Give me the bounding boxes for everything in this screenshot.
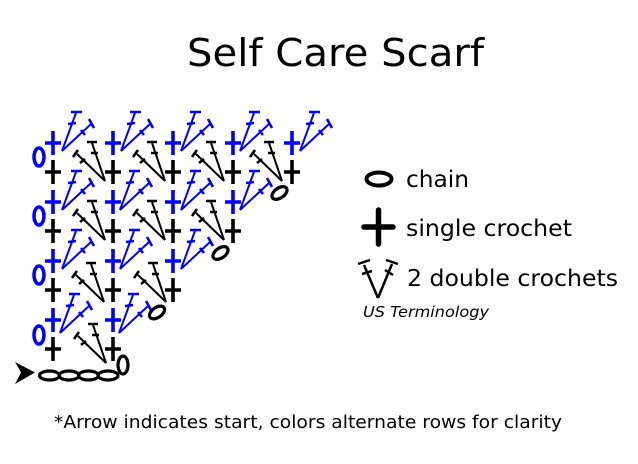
legend: single crochet: single crochet	[406, 216, 572, 242]
title: Self Care Scarf	[187, 31, 486, 76]
legend	[358, 167, 618, 321]
legend: 2 double crochets: 2 double crochets	[407, 266, 618, 292]
footnote: *Arrow indicates start, colors alternate rows for clarity	[54, 412, 562, 433]
foundation chain	[40, 371, 118, 380]
row of blue stitches 3	[45, 230, 213, 273]
start arrow	[15, 362, 35, 384]
legend note: US Terminology: US Terminology	[363, 303, 490, 321]
row of black stitches 2	[45, 201, 241, 262]
blue turning chains	[34, 148, 44, 344]
row of black stitches 1	[45, 142, 300, 202]
row of blue stitches 2	[45, 171, 272, 214]
legend: chain: chain	[406, 167, 469, 193]
row of blue stitches 1	[45, 112, 332, 155]
crochet chart	[15, 112, 332, 384]
legend: single crochet	[364, 210, 572, 244]
row of black stitches 3	[45, 263, 181, 321]
row of black stitches 4	[45, 324, 128, 374]
row of blue stitches 4	[45, 294, 151, 333]
legend: 2 double crochets	[358, 260, 618, 298]
legend: chain	[366, 167, 469, 193]
